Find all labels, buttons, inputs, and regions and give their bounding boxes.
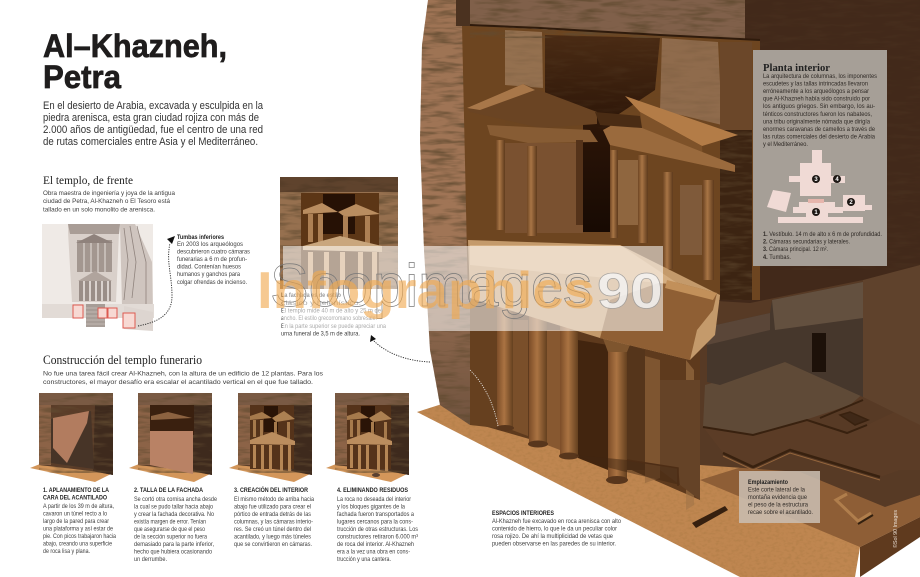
elevation drawing of the facade [42, 224, 154, 331]
step 2 text: existía margen de error. Tenían [134, 520, 206, 526]
step 4 thumbnail [326, 393, 409, 482]
watermark: Soopimages [270, 252, 592, 319]
entablature and frieze [468, 240, 720, 360]
callout: emplazamiento [739, 471, 820, 523]
watermark: 90 [597, 263, 663, 319]
step 1 text: CARA DEL ACANTILADO [43, 496, 107, 502]
step 3 text: El mismo método de arriba hacia [234, 497, 315, 503]
intro text: En el desierto de Arabia, excavada y esculpida en la [43, 100, 264, 112]
arrow: chambers to tumbas note [138, 236, 175, 326]
step 2 text: 2. TALLA DE LA FACHADA [134, 488, 204, 494]
note: espacios interiores [492, 511, 622, 548]
heading: construcción: Construcción del templo funerario [43, 352, 202, 367]
step 2 text: Se cortó otra cornisa ancha desde [134, 497, 218, 503]
step 2 text: hecho que hubiera ocasionando [134, 550, 213, 556]
step 1 text: de roca lisa y plana. [43, 549, 90, 555]
floor plan [767, 150, 872, 223]
step 3 text: acantilado, y luego más túneles [234, 534, 311, 540]
text: la fachada: clásico y helenístico. [281, 301, 361, 307]
step 1 text: A partir de los 39 m de altura, [43, 504, 114, 510]
panel text: una tribu originalmente nómada que dirigía [763, 120, 871, 126]
plan legend: 4. Tumbas. [763, 255, 791, 261]
main illustration: cutaway of Al-Khazneh [415, 0, 920, 577]
low walls on the floor [703, 400, 880, 480]
step 2 text [134, 488, 218, 563]
panel text [763, 74, 877, 148]
plan legend: 3. Cámara principal. 12 m². [763, 247, 828, 253]
note: espacios interiores: Al-Khazneh fue excavado en roca arenisca con alto [492, 519, 622, 525]
step 1 text: cavaron un túnel recto a lo [43, 512, 108, 518]
step 1 text: pie. Con picos trabajaron hacia [43, 534, 117, 540]
plan legend: 2. Cámaras secundarias y laterales. [763, 240, 850, 246]
red burial chambers [73, 305, 135, 328]
step 2 thumbnail [129, 393, 212, 482]
callout: emplazamiento: Emplazamiento [748, 480, 788, 486]
callout: emplazamiento: el peso de la estructura [748, 502, 809, 508]
plan legend [763, 232, 882, 261]
text: el templo [43, 191, 176, 214]
step 4 text: de roca del interior. Al-Khazneh [337, 542, 414, 548]
panel heading: Planta interior [763, 62, 830, 74]
step 4 text: trucción y una cantera. [337, 557, 391, 563]
step 3 text: columnas, y las cámaras interio- [234, 520, 313, 526]
watermark [257, 246, 663, 331]
arrow: facade note [370, 335, 430, 362]
left rock wall [420, 0, 470, 425]
intro text: piedra arenisca, esta gran ciudad rojiza con más de [43, 112, 259, 124]
step 2 text: que asegurarse de que el peso [134, 527, 206, 533]
note: tumbas inferiores: didad. Contenían huesos [177, 264, 241, 270]
step 3 text: res. Se creó un túnel dentro del [234, 527, 311, 533]
interior floor [660, 260, 920, 507]
text: construcción: No fue una tarea fácil crear Al-Khazneh, con la altura de un edificio de 12 plantas. Para los [43, 372, 323, 378]
title [43, 28, 227, 95]
title: Al–Khazneh, [43, 28, 227, 64]
step 1 text: largo de la pared para crear [43, 519, 109, 525]
text: la fachada: La fachada es de estilo [281, 293, 341, 299]
plan markers: 3 [814, 177, 818, 183]
text: el templo: ciudad de Petra, Al-Khazneh o El Tesoro está [43, 199, 171, 205]
ghosted cut columns [645, 356, 700, 510]
photo-like view of the facade [280, 177, 398, 289]
watermark: Infographics [257, 262, 595, 320]
heading: el templo, de frente: El templo, de frente [43, 173, 133, 187]
callout: emplazamiento: montaña evidencia que [748, 495, 808, 501]
step 3 text [234, 486, 315, 548]
dotted arc on the rock [470, 370, 498, 426]
note: tumbas inferiores: funerarias a 6 m de profun- [177, 257, 247, 263]
step 3 text: que se convirtieron en cámaras. [234, 542, 312, 548]
upper storey: right pavilion [595, 96, 738, 280]
upper niche [462, 25, 760, 300]
text: la fachada: El templo mide 40 m de alto y 25 m de [281, 308, 382, 314]
step 3 text: pórtico de entrada detrás de las [234, 512, 311, 518]
note: tumbas inferiores: colgar ofrendas de incienso. [177, 280, 247, 286]
note: tumbas inferiores [177, 235, 250, 286]
panel text: que Al-Khazneh había sido construido por [763, 96, 870, 102]
plan legend: 1. Vestíbulo. 14 m de alto x 6 m de profundidad. [763, 232, 882, 238]
step 4 text: La roca no deseada del interior [337, 497, 411, 503]
text: construcción: constructores, el mayor desafío era escalar el acantilado vertical en el que fue tallado. [43, 380, 313, 386]
dark ceiling mass [690, 0, 920, 303]
step 2 text: un derrumbe. [134, 557, 167, 563]
callout: emplazamiento: recae sobre el acantilado. [748, 510, 813, 516]
text: el templo: Obra maestra de ingeniería y joya de la antigua [43, 191, 176, 197]
note: espacios interiores: ESPACIOS INTERIORES [492, 511, 554, 517]
panel text: erróneamente a los arqueólogos a pensar [763, 89, 869, 95]
note: tumbas inferiores: Tumbas inferiores [177, 235, 225, 241]
step 1 text: una plataforma y así estar de [43, 526, 114, 532]
panel text: las rutas comerciales del desierto de Arabia [763, 134, 876, 140]
columns of the lower storey [496, 300, 632, 484]
panel text: los antiguos griegos. Sin embargo, los au- [763, 104, 875, 110]
text: el templo: tallado en un solo monolito de arenisca. [43, 208, 155, 214]
plan markers: 1 [814, 210, 818, 216]
credit: ©Sol 90 Images [892, 509, 899, 548]
note: tumbas inferiores: descubrieron cuatro cámaras [177, 250, 250, 256]
step 1 thumbnail [30, 393, 113, 482]
text: la fachada: ancho. El estilo grecorromano sobresale. [281, 316, 377, 322]
note: espacios interiores: contenido de hierro, lo que le da un peculiar color [492, 526, 617, 532]
step 2 text: de la sección superior no fuera [134, 534, 208, 540]
note: tumbas inferiores: En 2003 los arqueólogos [177, 242, 243, 248]
note: espacios interiores: pueden observarse en las paredes de su interior. [492, 542, 616, 548]
panel text: enormes caravanas de camellos a través de [763, 127, 876, 133]
plan markers: 4 [835, 177, 839, 183]
lower storey: portico interior and side [470, 295, 700, 500]
title: Petra [43, 59, 121, 95]
step 4 text: lugares cercanos para la cons- [337, 520, 413, 526]
panel: planta interior [753, 50, 887, 266]
step 1 text: abajo, creando una superficie [43, 542, 113, 548]
step 3 text: 3. CREACIÓN DEL INTERIOR [234, 486, 309, 494]
intro text: de rutas comerciales entre Asia y el Mediterráneo. [43, 136, 258, 148]
step 4 text: constructores retiraron 6.000 m³ [337, 534, 418, 540]
step 3 thumbnail [229, 393, 312, 482]
text: la fachada: En la parte superior se puede apreciar una [281, 324, 387, 330]
text: la fachada [281, 293, 387, 338]
step 4 text [337, 488, 418, 563]
step 3 text: abajo fue utilizado para crear el [234, 504, 311, 510]
intro text: 2.000 años de antigüedad, fue el centro de una red [43, 124, 263, 136]
step 4 text: 4. ELIMINANDO RESIDUOS [337, 488, 408, 494]
upper storey: left pavilion [467, 84, 598, 236]
step 4 text: trucción de otras estructuras. Los [337, 527, 418, 533]
callout: emplazamiento: Este corte lateral de la [748, 488, 806, 494]
plan markers [812, 175, 855, 216]
text: la fachada: urna funeral de 3,5 m de altura. [281, 332, 360, 338]
rock cornice at top [456, 0, 760, 40]
step 2 text: y crear la fachada decorativa. No [134, 512, 215, 518]
panel text: ténticos constructores fueron los nabateos, [763, 112, 872, 118]
step 2 text: demasiado para la parte inferior, [134, 542, 214, 548]
note: espacios interiores: rosa rojizo. De ahí la multiplicidad de vetas que [492, 534, 614, 540]
step 4 text: era a la vez una obra en cons- [337, 550, 410, 556]
step 2 text: la cual se pudo tallar hacia abajo [134, 504, 214, 510]
platform base [417, 395, 920, 577]
intro text [43, 100, 264, 148]
step 1 text: 1. APLANAMIENTO DE LA [43, 488, 110, 494]
panel text: La arquitectura de columnas, los imponentes [763, 74, 877, 80]
note: tumbas inferiores: humanos y ganchos para [177, 272, 241, 278]
panel text: y el Mediterráneo. [763, 142, 808, 148]
plan markers: 2 [849, 200, 853, 206]
step 4 text: fachada fueron transportados a [337, 512, 415, 518]
text: construcción [43, 372, 323, 386]
panel text: escudetes y las tallas intrincadas llevaron [763, 82, 868, 88]
floor shadows and low walls [575, 455, 873, 528]
interior rooms and back wall [707, 265, 920, 425]
step 1 text [43, 488, 117, 555]
step 4 text: y los bloques gigantes de la [337, 504, 406, 510]
